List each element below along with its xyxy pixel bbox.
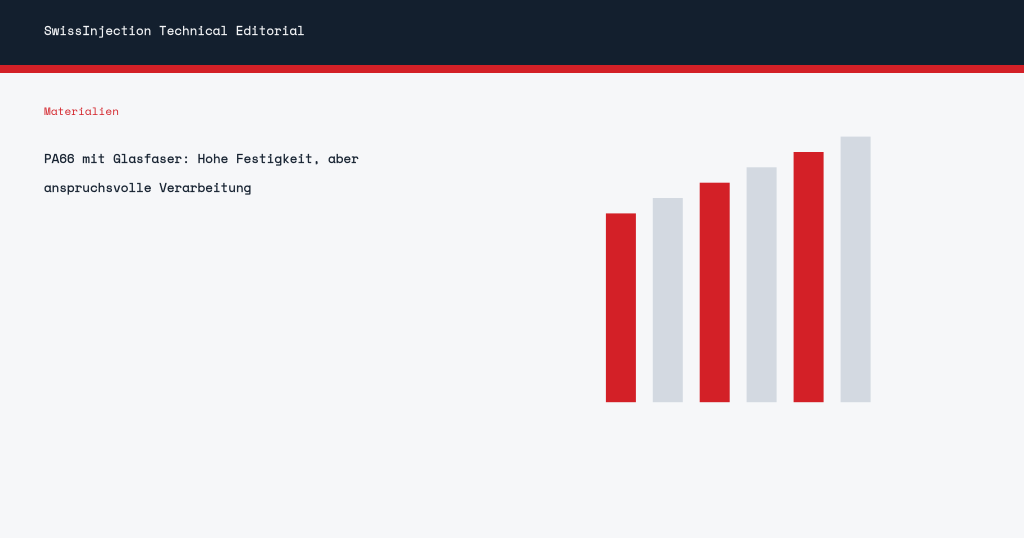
headline: PA66 mit Glasfaser: Hohe Festigkeit, aber bbox=[44, 149, 359, 168]
header title: SwissInjection Technical Editorial bbox=[44, 21, 305, 40]
category label: Materialien bbox=[44, 104, 119, 120]
headline: anspruchsvolle Verarbeitung bbox=[44, 178, 251, 197]
header band bbox=[0, 0, 1024, 72]
red accent stripe bbox=[0, 65, 1024, 72]
headline bbox=[44, 149, 359, 197]
